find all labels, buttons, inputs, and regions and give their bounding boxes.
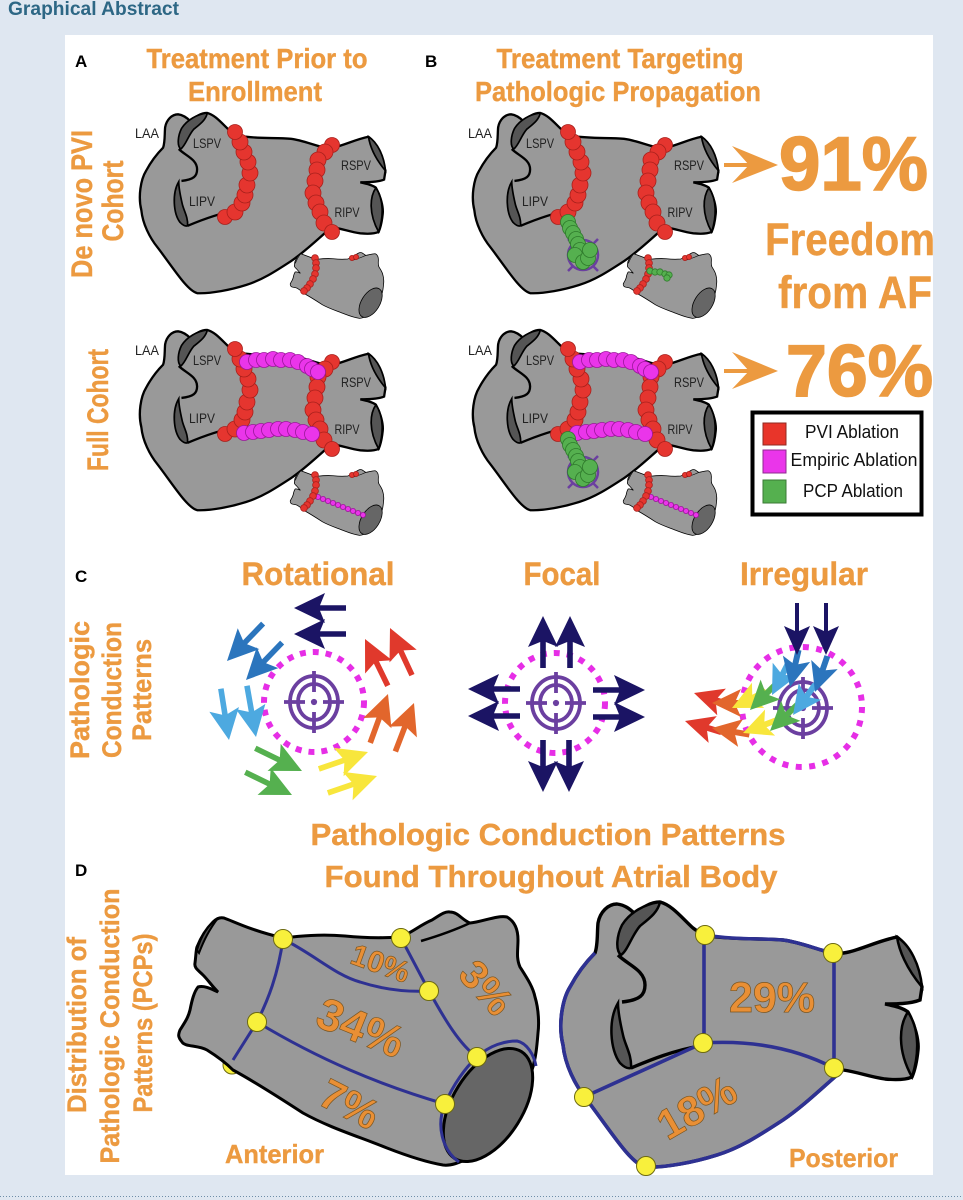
percentages: posterior: 29% (729, 974, 815, 1022)
heart: full cohort with PCP ablation: RIPV (668, 422, 692, 437)
heart: de novo PVI before treatment: LIPV (189, 194, 215, 209)
heart: de novo PVI before treatment: LAA (135, 126, 159, 141)
heart: de novo PVI with PCP ablation: RSPV (674, 158, 704, 173)
heart: full cohort before treatment: LAA (135, 343, 159, 358)
panel letter B: B (425, 52, 437, 71)
row label: Pathologic Conduction Patterns: Patterns (127, 639, 157, 741)
legend: PCP Ablation (803, 480, 903, 501)
heart: de novo PVI with PCP ablation: LSPV (526, 136, 554, 151)
legend: PVI Ablation (805, 421, 899, 442)
row label: De novo PVI Cohort: Cohort (97, 160, 130, 242)
heart: full cohort with PCP ablation: RSPV (674, 375, 704, 390)
panel letter A: A (75, 52, 87, 71)
heading D: Pathologic Conduction Patterns (310, 817, 786, 852)
heading: Focal: Focal (524, 556, 600, 592)
region boundaries (233, 938, 536, 1162)
heading A (146, 43, 368, 107)
row label: Distribution of Pathologic Conduction Patterns (PCPs): Distribution of (62, 936, 92, 1113)
row label: Pathologic Conduction Patterns (65, 621, 157, 759)
percentages: anterior: 3% (450, 952, 521, 1025)
heading B: Treatment Targeting (496, 43, 744, 74)
heart: full cohort with PCP ablation: LIPV (522, 411, 548, 426)
panel letter C: C (75, 567, 87, 586)
row label: Full Cohort: Full Cohort (82, 349, 115, 471)
percentages: anterior: 34% (309, 987, 412, 1068)
row label: De novo PVI Cohort: De novo PVI (66, 130, 99, 278)
heart: de novo PVI before treatment (135, 113, 385, 293)
result: 91%: 91% (779, 122, 928, 207)
panel letter D: D (75, 861, 87, 880)
row label: Distribution of Pathologic Conduction Patterns (PCPs): Patterns (PCPs) (128, 934, 158, 1112)
small anterior heart: de novo PVI (290, 252, 387, 321)
row label: Pathologic Conduction Patterns: Pathologic (65, 621, 95, 759)
result: 76%: 76% (786, 331, 933, 412)
heading: Rotational: Rotational (242, 556, 394, 592)
label: Posterior: Posterior (789, 1143, 898, 1173)
heart: anterior view (179, 912, 551, 1177)
heart: full cohort with PCP ablation: LSPV (526, 353, 554, 368)
percentages: anterior (309, 938, 521, 1139)
heart: de novo PVI before treatment: RSPV (341, 158, 371, 173)
heart: de novo PVI with PCP ablation: LAA (468, 126, 492, 141)
percentages: posterior: 18% (649, 1066, 745, 1149)
panel B: treatment targeting pathologic propagation (425, 43, 761, 538)
region nodes (248, 928, 486, 1114)
heart: de novo PVI with PCP ablation: LIPV (522, 194, 548, 209)
heading B: Pathologic Propagation (475, 76, 761, 107)
legend (752, 412, 922, 514)
heading: Irregular: Irregular (740, 556, 868, 592)
heart: de novo PVI with PCP ablation (468, 113, 718, 293)
region boundaries (561, 935, 843, 1167)
percentages: anterior: 7% (312, 1069, 387, 1139)
arrow: to 76% (724, 352, 778, 389)
heart: full cohort before treatment: RSPV (341, 375, 371, 390)
heart: de novo PVI before treatment: LSPV (193, 136, 221, 151)
panel D: distribution of PCPs (62, 817, 922, 1177)
text: Freedom from AF (765, 214, 935, 318)
region nodes (574, 926, 844, 1176)
legend: Empiric Ablation (790, 449, 918, 470)
panel A: treatment prior to enrollment (66, 43, 387, 538)
diagram: irregular pattern (681, 603, 862, 767)
text: Freedom from AF: Freedom (765, 214, 935, 265)
diagram: rotational pattern (206, 593, 428, 808)
panel C: pathologic conduction patterns (65, 556, 868, 808)
percentages: posterior (649, 974, 815, 1149)
heart: full cohort before treatment (135, 330, 385, 510)
heart: posterior view (561, 902, 922, 1176)
heart: de novo PVI with PCP ablation: RIPV (668, 205, 692, 220)
row label: Distribution of Pathologic Conduction Patterns (PCPs): Pathologic Conduction (95, 888, 125, 1164)
heart: de novo PVI before treatment: RIPV (334, 205, 360, 220)
small anterior heart: de novo with PCP (623, 252, 720, 321)
text: Freedom from AF: from AF (778, 267, 932, 318)
heading A: Treatment Prior to (146, 43, 368, 74)
heart: full cohort before treatment: RIPV (334, 422, 360, 437)
row label: De novo PVI Cohort (66, 130, 130, 278)
heart: full cohort with PCP ablation: LAA (468, 343, 492, 358)
heart: full cohort with PCP ablation (468, 330, 718, 510)
heading D (310, 817, 786, 894)
small anterior heart: full cohort (290, 469, 387, 538)
row label: Distribution of Pathologic Conduction Patterns (PCPs) (62, 888, 158, 1164)
heading A: Enrollment (188, 76, 322, 107)
percentages: anterior: 10% (346, 938, 414, 990)
heart: full cohort before treatment: LIPV (189, 411, 215, 426)
heading B (475, 43, 761, 107)
label: Anterior: Anterior (225, 1139, 324, 1169)
small anterior heart: full cohort with PCP (623, 469, 720, 538)
diagram: focal pattern (468, 616, 645, 792)
heading D: Found Throughout Atrial Body (324, 859, 778, 894)
row label: Pathologic Conduction Patterns: Conduction (97, 622, 127, 758)
heart: full cohort before treatment: LSPV (193, 353, 221, 368)
arrow: to 91% (724, 146, 778, 183)
